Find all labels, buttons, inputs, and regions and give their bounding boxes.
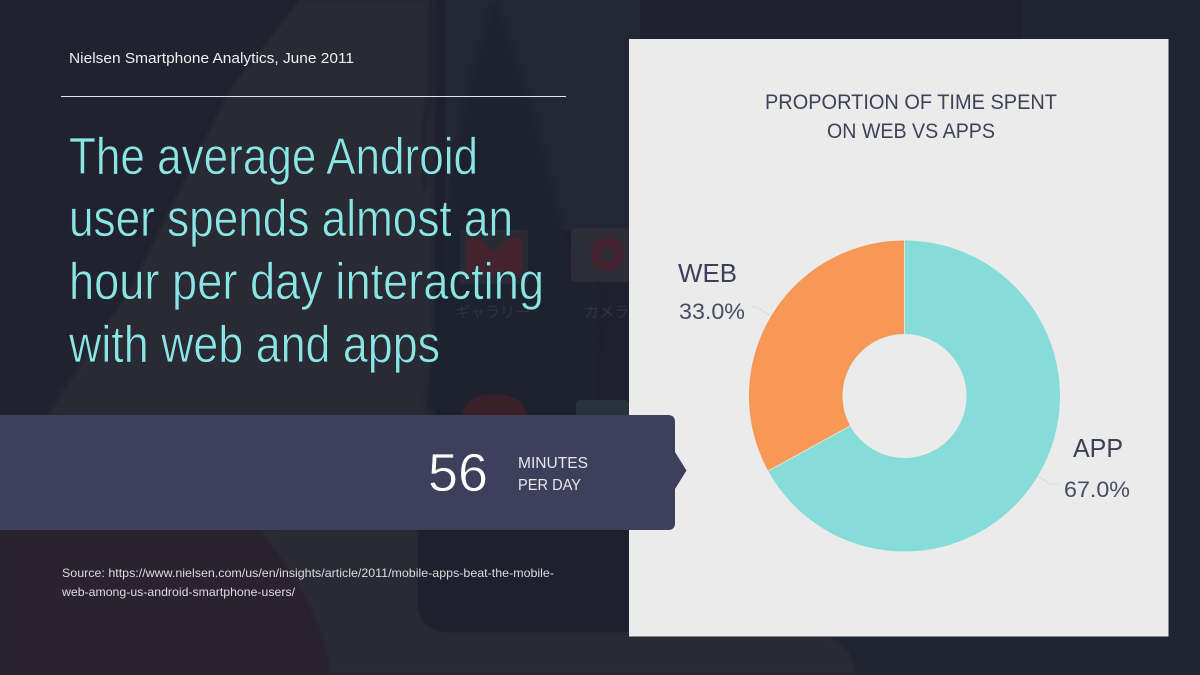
background: phone lower screen <box>418 530 629 632</box>
heading <box>68 128 544 374</box>
background: faded japanese app labels: ギャラリー <box>455 304 530 321</box>
background: green app icon <box>576 400 629 420</box>
donut chart <box>749 240 1060 551</box>
label: web: 33.0% <box>679 299 745 324</box>
source citation: web-among-us-android-smartphone-users/ <box>61 585 296 599</box>
stat unit: MINUTES <box>518 455 588 472</box>
background: fingers <box>260 530 855 675</box>
source citation: Source: https://www.nielsen.com/us/en/insights/article/2011/mobile-apps-beat-the-mobile- <box>62 566 554 580</box>
stat: 56 minutes per day <box>428 443 588 503</box>
label: web: WEB <box>678 258 737 288</box>
background: phone edge <box>424 0 432 190</box>
chart title: ON WEB VS APPS <box>827 120 995 143</box>
stat unit <box>518 455 588 494</box>
donut slice: web 33% <box>749 240 904 471</box>
chart title <box>765 91 1057 143</box>
background: faded japanese app labels <box>455 304 629 321</box>
background: hand <box>45 0 432 420</box>
label: app: 67.0% <box>1064 477 1130 502</box>
heading: hour per day interacting <box>69 253 544 311</box>
background: tree silhouette <box>425 0 600 410</box>
background: faded japanese app labels: カメラ <box>584 304 629 321</box>
donut slice: app 67% <box>768 240 1060 551</box>
background: gallery app icon <box>460 230 528 284</box>
source date label: Nielsen Smartphone Analytics, June 2011 <box>69 50 354 67</box>
background: maroon sleeve <box>0 530 330 675</box>
stat number: 56 <box>428 443 488 503</box>
background: phone screen <box>418 0 1022 632</box>
label: web <box>678 258 770 324</box>
heading: with web and apps <box>68 316 440 374</box>
label: app <box>1038 433 1130 502</box>
callout banner with arrow <box>0 415 686 530</box>
heading: The average Android <box>69 128 478 186</box>
heading: user spends almost an <box>69 190 513 248</box>
chart title: PROPORTION OF TIME SPENT <box>765 91 1057 114</box>
panel: chart background <box>629 39 1168 636</box>
source citation <box>61 566 554 599</box>
stat unit: PER DAY <box>518 477 581 494</box>
background: sky tint <box>445 0 640 230</box>
divider rule <box>61 96 566 97</box>
background: camera app icon <box>571 228 629 282</box>
background: red app icon <box>462 394 527 415</box>
background: dark left area <box>0 0 300 415</box>
slice separators <box>768 240 904 471</box>
label: app: APP <box>1073 433 1123 463</box>
